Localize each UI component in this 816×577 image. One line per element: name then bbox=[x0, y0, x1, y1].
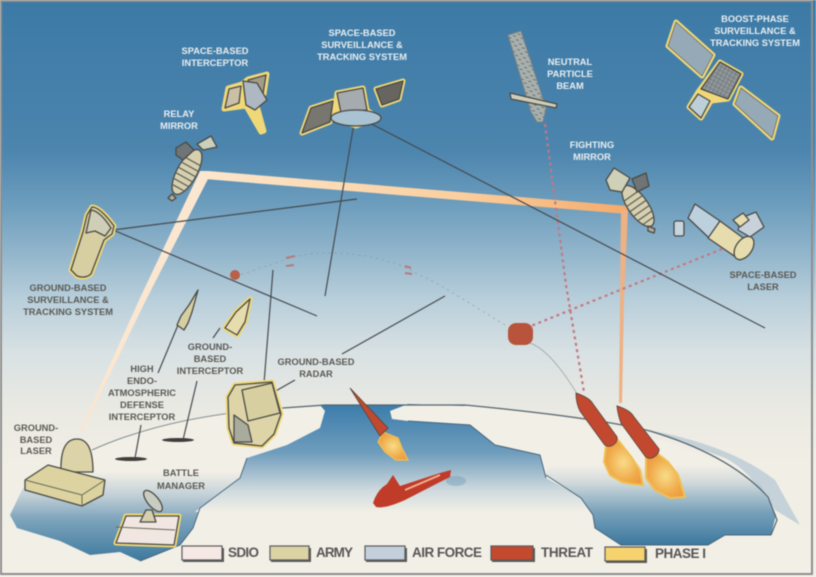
legend: Army bbox=[270, 545, 353, 562]
label: battle manager: MANAGER bbox=[157, 481, 205, 491]
icon: high endo-atmospheric interceptor bbox=[177, 290, 198, 330]
label: space-based interceptor: SPACE-BASED bbox=[182, 46, 249, 56]
icon: ground-based radar bbox=[228, 382, 281, 446]
label: ground-based interceptor: GROUND- bbox=[188, 342, 232, 352]
icon: boost-phase surveillance satellite bbox=[668, 22, 778, 138]
icon: neutral particle beam bbox=[508, 31, 557, 122]
icon: fighting mirror bbox=[606, 168, 660, 233]
launch site shadows bbox=[115, 438, 194, 461]
label: relay mirror: MIRROR bbox=[160, 121, 198, 131]
label: space-based interceptor: INTERCEPTOR bbox=[182, 58, 249, 68]
legend: Air Force: AIR FORCE bbox=[412, 545, 482, 560]
legend bbox=[182, 545, 706, 563]
label: boost-phase surveillance and tracking system: BOOST-PHASE bbox=[721, 14, 789, 24]
legend: SDIO: SDIO bbox=[228, 545, 259, 560]
label: ground-based interceptor: INTERCEPTOR bbox=[177, 366, 244, 376]
label: space-based laser: SPACE-BASED bbox=[730, 270, 797, 280]
missile trajectories bbox=[240, 253, 576, 392]
icon: relay mirror bbox=[166, 136, 217, 201]
relay laser beam bbox=[80, 171, 628, 432]
label: ground-based surveillance and tracking system: SURVEILLANCE & bbox=[27, 295, 109, 305]
atmosphere limb bbox=[648, 430, 800, 525]
legend: Threat bbox=[491, 545, 594, 562]
legend: Phase I: PHASE I bbox=[655, 546, 706, 561]
label: ground-based laser: LASER bbox=[20, 446, 52, 456]
icon: ground-based interceptor missile bbox=[225, 299, 250, 335]
label: high endo-atmospheric defense interceptor: HIGH bbox=[130, 364, 154, 374]
coastlines bbox=[283, 405, 777, 535]
label: high endo-atmospheric defense interceptor: ENDO- bbox=[127, 376, 157, 386]
label: neutral particle beam: BEAM bbox=[556, 81, 584, 91]
icon: boost-phase missile, centre bbox=[350, 388, 408, 460]
label: high endo-atmospheric defense interceptor: INTERCEPTOR bbox=[109, 412, 176, 422]
icon: space-based interceptor bbox=[224, 74, 267, 132]
label: space-based surveillance and tracking system: SPACE-BASED bbox=[329, 28, 396, 38]
particle beam and laser dashes bbox=[526, 124, 722, 392]
label: ground-based surveillance and tracking system: GROUND-BASED bbox=[30, 283, 107, 293]
icon: space-based surveillance satellite bbox=[302, 81, 403, 133]
label: battle manager: BATTLE bbox=[163, 468, 199, 478]
label: space-based laser: LASER bbox=[747, 282, 779, 292]
ocean: right bbox=[546, 465, 776, 545]
label: boost-phase surveillance and tracking system: TRACKING SYSTEM bbox=[710, 38, 800, 48]
icon: battle manager bbox=[116, 488, 179, 545]
threat warheads bbox=[230, 256, 533, 345]
label: fighting mirror: MIRROR bbox=[573, 152, 611, 162]
label: space-based surveillance and tracking system: TRACKING SYSTEM bbox=[317, 52, 407, 62]
legend: Threat: THREAT bbox=[541, 545, 594, 560]
label: ground-based radar: RADAR bbox=[299, 369, 333, 379]
globe: land and oceans bbox=[0, 404, 816, 577]
label: high endo-atmospheric defense interceptor: DEFENSE bbox=[120, 400, 164, 410]
icon: submarine bbox=[373, 470, 466, 507]
label: space-based surveillance and tracking system: SURVEILLANCE & bbox=[321, 40, 403, 50]
icon: ground-based laser bbox=[25, 439, 105, 506]
label: boost-phase surveillance and tracking system: SURVEILLANCE & bbox=[714, 26, 796, 36]
ocean: middle bbox=[195, 404, 590, 512]
legend: Air Force bbox=[365, 545, 482, 562]
label: ground-based interceptor: BASED bbox=[194, 354, 227, 364]
icon: space-based laser bbox=[674, 204, 764, 263]
label: ground-based surveillance and tracking system: TRACKING SYSTEM bbox=[23, 307, 113, 317]
label: relay mirror: RELAY bbox=[164, 109, 195, 119]
label: neutral particle beam: PARTICLE bbox=[547, 69, 593, 79]
legend: Phase I bbox=[605, 546, 706, 563]
label: neutral particle beam: NEUTRAL bbox=[548, 57, 593, 67]
ocean: left bbox=[10, 458, 247, 561]
legend: Army: ARMY bbox=[316, 545, 353, 560]
icon: threat missiles bbox=[576, 393, 685, 498]
label: fighting mirror: FIGHTING bbox=[570, 140, 614, 150]
icon: ground-based surveillance sensor bbox=[71, 207, 114, 277]
label: ground-based laser: BASED bbox=[20, 435, 53, 445]
sensor tracking lines bbox=[113, 117, 765, 458]
label: high endo-atmospheric defense interceptor: ATMOSPHERIC bbox=[108, 388, 176, 398]
label: ground-based radar: GROUND-BASED bbox=[278, 357, 355, 367]
legend: SDIO bbox=[182, 545, 259, 562]
label: ground-based laser: GROUND- bbox=[14, 423, 58, 433]
